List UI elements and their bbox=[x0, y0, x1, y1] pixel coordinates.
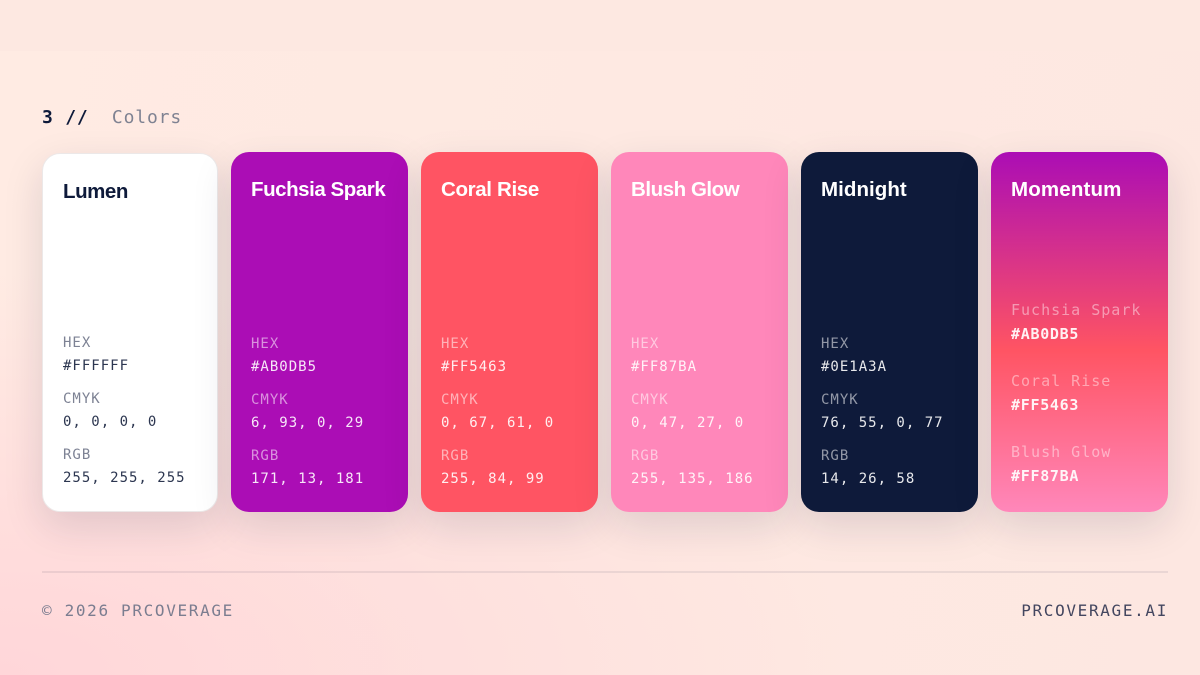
footer copyright: © 2026 PRCOVERAGE bbox=[42, 601, 234, 620]
value: hex: #FFFFFF bbox=[63, 358, 129, 374]
footer site url: PRCOVERAGE.AI bbox=[1021, 601, 1168, 620]
label: CMYK: CMYK bbox=[251, 392, 289, 408]
value: rgb: 171, 13, 181 bbox=[251, 471, 364, 487]
label: RGB: RGB bbox=[63, 447, 91, 463]
value: cmyk: 0, 0, 0, 0 bbox=[63, 414, 157, 430]
label: HEX: HEX bbox=[251, 336, 279, 352]
gradient stop name: Fuchsia Spark: Fuchsia Spark bbox=[1011, 301, 1141, 319]
label: HEX: HEX bbox=[441, 336, 469, 352]
gradient stop hex: Fuchsia Spark: #AB0DB5 bbox=[1011, 325, 1079, 343]
value: hex: #AB0DB5 bbox=[251, 359, 317, 375]
panel: Momentum gradient swatch bbox=[991, 152, 1168, 512]
swatch name: Midnight: Midnight bbox=[821, 178, 907, 201]
label: RGB: RGB bbox=[821, 448, 849, 464]
panel: Fuchsia Spark swatch bbox=[231, 152, 408, 512]
gradient stop name: Blush Glow: Blush Glow bbox=[1011, 443, 1111, 461]
panel: Blush Glow swatch bbox=[611, 152, 788, 512]
label: RGB: RGB bbox=[631, 448, 659, 464]
panel: Coral Rise swatch bbox=[421, 152, 598, 512]
value: cmyk: 0, 67, 61, 0 bbox=[441, 415, 554, 431]
top band bbox=[0, 0, 1200, 51]
label: HEX: HEX bbox=[631, 336, 659, 352]
label: HEX: HEX bbox=[63, 335, 91, 351]
value: rgb: 14, 26, 58 bbox=[821, 471, 915, 487]
section heading: 3 // Colors bbox=[42, 107, 182, 128]
value: rgb: 255, 255, 255 bbox=[63, 470, 186, 486]
label: RGB: RGB bbox=[441, 448, 469, 464]
swatch name: Momentum: Momentum bbox=[1011, 178, 1122, 201]
gradient stop hex: Blush Glow: #FF87BA bbox=[1011, 467, 1079, 485]
swatch name: Coral Rise: Coral Rise bbox=[441, 178, 539, 201]
swatch name: Blush Glow: Blush Glow bbox=[631, 178, 739, 201]
panel: Lumen swatch bbox=[42, 153, 218, 512]
value: cmyk: 6, 93, 0, 29 bbox=[251, 415, 364, 431]
panel: Midnight swatch bbox=[801, 152, 978, 512]
label: CMYK: CMYK bbox=[821, 392, 859, 408]
value: cmyk: 76, 55, 0, 77 bbox=[821, 415, 944, 431]
swatch name: Fuchsia Spark: Fuchsia Spark bbox=[251, 178, 385, 201]
label: HEX: HEX bbox=[821, 336, 849, 352]
label: CMYK: CMYK bbox=[63, 391, 101, 407]
label: RGB: RGB bbox=[251, 448, 279, 464]
gradient stop hex: Coral Rise: #FF5463 bbox=[1011, 396, 1079, 414]
value: cmyk: 0, 47, 27, 0 bbox=[631, 415, 744, 431]
value: rgb: 255, 135, 186 bbox=[631, 471, 754, 487]
value: rgb: 255, 84, 99 bbox=[441, 471, 545, 487]
value: hex: #FF87BA bbox=[631, 359, 697, 375]
label: CMYK: CMYK bbox=[441, 392, 479, 408]
swatch name: Lumen: Lumen bbox=[63, 180, 128, 203]
gradient stop name: Coral Rise: Coral Rise bbox=[1011, 372, 1111, 390]
label: CMYK: CMYK bbox=[631, 392, 669, 408]
value: hex: #0E1A3A bbox=[821, 359, 887, 375]
value: hex: #FF5463 bbox=[441, 359, 507, 375]
